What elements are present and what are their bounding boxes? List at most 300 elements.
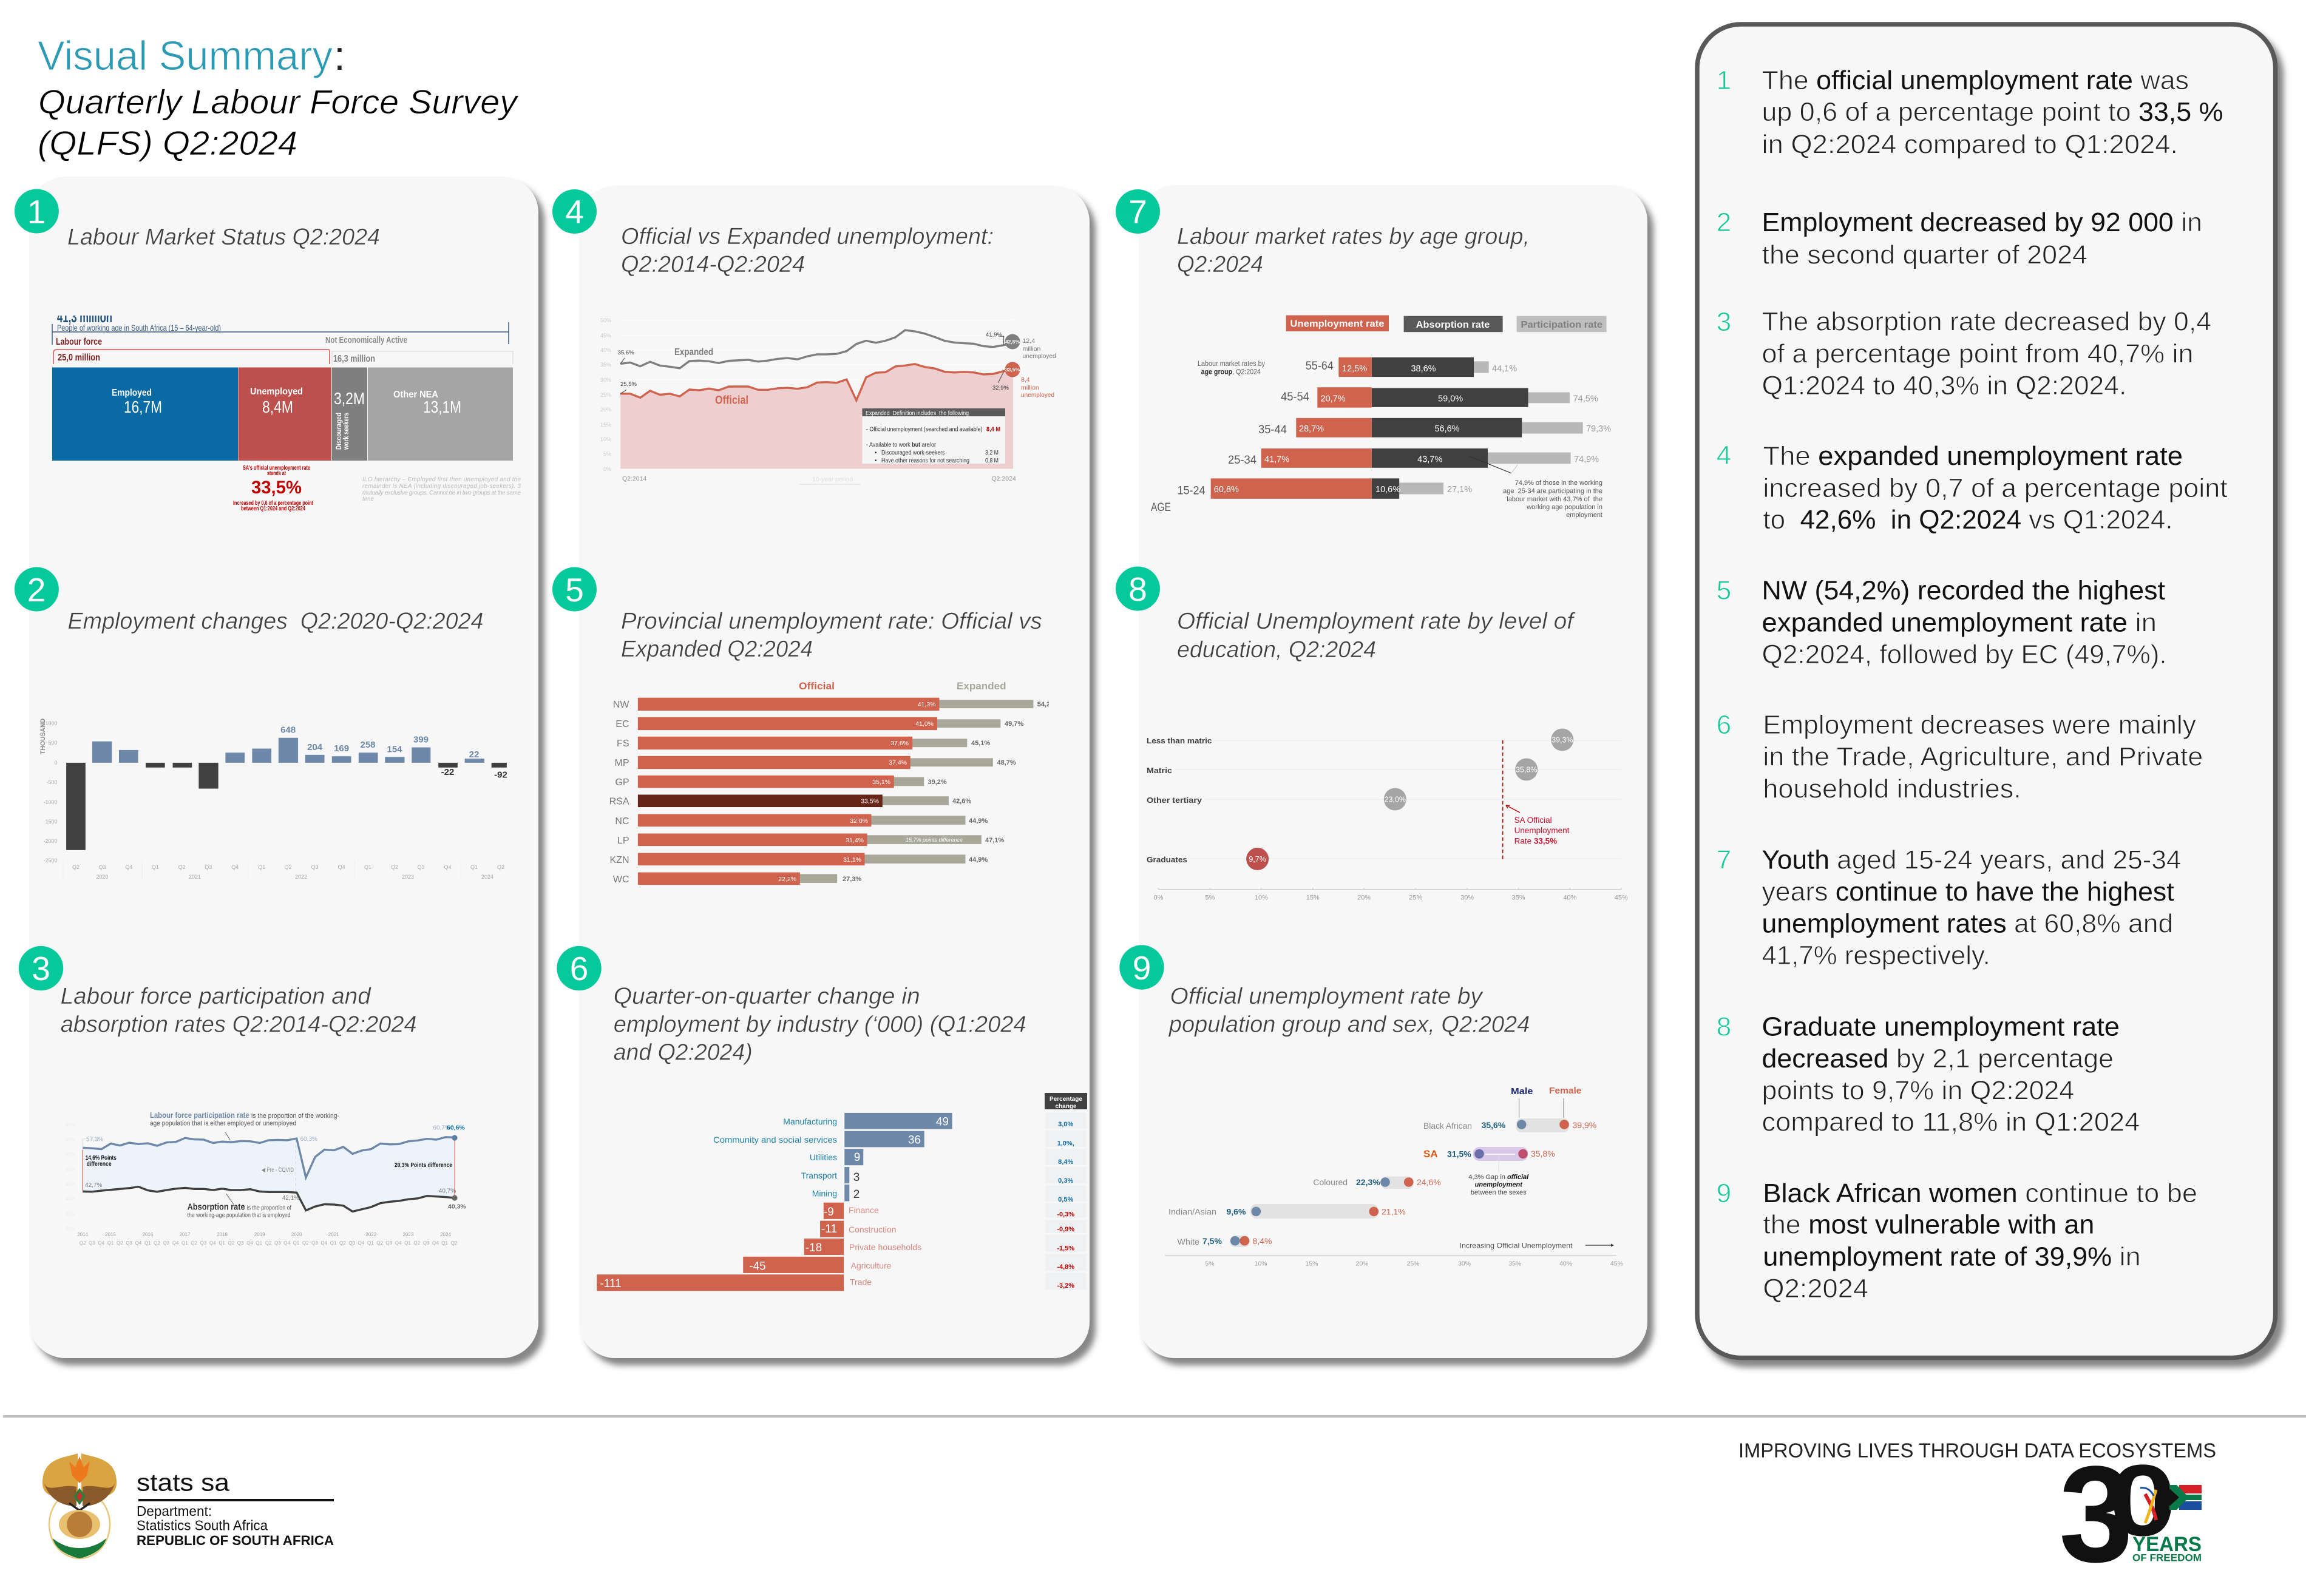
finding 7 [1717, 845, 2182, 970]
chart: labour market stacked bar: Not Economically Active [325, 335, 407, 345]
bar chart: provincial rates: 35,1% [872, 779, 890, 786]
bar chart: industry change: -9 [824, 1206, 834, 1219]
line chart: participation and absorption rates: 40% [66, 1196, 75, 1202]
finding 4: to 42,6% in Q2:2024 vs Q1:2024. [1763, 505, 2173, 535]
dumbbell chart: population group and sex: 9,6% [1226, 1206, 1246, 1216]
heading 6: Quarter-on-quarter change in [614, 984, 920, 1009]
line chart: official vs expanded unemployment: 20% [600, 407, 611, 413]
chart: labour market stacked bar: mutually exclusive groups. Cannot be in two groups at the same [362, 490, 521, 496]
badge 1 [15, 189, 59, 233]
line chart: participation and absorption rates: 2024 [440, 1232, 451, 1237]
section 9: population group and sex [1119, 945, 1623, 1267]
chart: labour market stacked bar: stands at [267, 470, 286, 477]
finding 5: expanded unemployment rate in [1762, 607, 2157, 637]
finding 7: years continue to have the highest [1762, 877, 2174, 907]
diverging bar chart: age groups: 12,5% [1342, 364, 1367, 374]
box: expanded definition: 8,4 M [986, 426, 1000, 433]
table: percentage change: -1,5% [1057, 1245, 1074, 1253]
heading 2: Employment changes Q2:2020-Q2:2024 [68, 609, 483, 634]
table: percentage change: 0,5% [1058, 1196, 1073, 1203]
line chart: participation and absorption rates: 42,1% [282, 1195, 299, 1202]
annotation: gap between sexes [1468, 1174, 1529, 1196]
diverging bar chart: age groups: 43,7% [1417, 455, 1442, 465]
bar chart: employment changes: -2000 [43, 838, 57, 844]
bar chart: industry change: Finance [849, 1205, 879, 1215]
dot plot: education: 30% [1460, 894, 1474, 902]
key findings card [1697, 24, 2276, 1358]
line chart: participation and absorption rates: 55% [66, 1152, 75, 1157]
bar chart: industry change: 2 [853, 1188, 860, 1201]
bar chart: provincial rates: 54,2% [1037, 701, 1056, 708]
finding 8: Graduate unemployment rate [1762, 1012, 2120, 1041]
line chart: participation and absorption rates: 60,7% [433, 1124, 450, 1131]
bar chart: industry change: -18 [805, 1242, 822, 1254]
dumbbell chart: population group and sex: 39,9% [1572, 1120, 1596, 1130]
heading 9 [1168, 984, 1530, 1038]
finding 6: Employment decreases were mainly [1763, 710, 2196, 740]
bar chart: employment changes: Q3 [205, 864, 212, 870]
dumbbell chart: population group and sex: 7,5% [1202, 1236, 1222, 1246]
bar chart: provincial rates: Official [799, 680, 835, 692]
finding 9: unemployment rate of 39,9% in [1763, 1242, 2141, 1271]
diverging bar chart: age groups: 38,6% [1411, 364, 1436, 374]
dumbbell chart: population group and sex: 45% [1610, 1260, 1623, 1267]
line chart: official vs expanded unemployment: 25,5% [620, 381, 637, 388]
diverging bar chart: age groups: 25-34 [1228, 454, 1256, 467]
annotation: 25-34 [1503, 479, 1602, 519]
bar chart: provincial rates: 37,6% [890, 740, 909, 747]
box: expanded definition: Expanded Definition includes the following [866, 410, 969, 417]
dumbbell chart: population group and sex: 8,4% [1253, 1236, 1272, 1246]
section 7: rates by age group [1116, 189, 1611, 519]
finding 3 [1717, 307, 2211, 401]
bar chart: employment changes: Q2 [497, 864, 504, 870]
finding 1: up 0,6 of a percentage point to 33,5 % [1762, 97, 2223, 127]
line chart: official vs expanded unemployment [600, 317, 1056, 484]
department text [137, 1503, 334, 1548]
dumbbell chart: population group and sex: 31,5% [1447, 1149, 1471, 1158]
chart: labour market stacked bar: Increased by 0,6 of a percentage point [233, 500, 313, 507]
panel: column 3 [1116, 185, 1647, 1358]
dumbbell chart: population group and sex: 24,6% [1417, 1177, 1441, 1187]
finding 5: Q2:2024, followed by EC (49,7%). [1762, 640, 2167, 669]
badge 8: 8 [1128, 570, 1147, 608]
bar chart: industry change: 9 [854, 1151, 860, 1164]
department text: Department: [137, 1503, 212, 1519]
bar chart: provincial rates: 39,2% [927, 779, 947, 786]
chart: labour market stacked bar: Employed [112, 388, 152, 398]
line chart: official vs expanded unemployment: 35,6% [618, 350, 634, 356]
table: percentage change: 8,4% [1058, 1158, 1073, 1166]
footer: slogan: IMPROVING LIVES THROUGH DATA ECOSYSTEMS [1738, 1439, 2216, 1462]
line chart: official vs expanded unemployment: Q2:2014 [622, 475, 646, 482]
bar chart: provincial rates: FS [617, 739, 629, 749]
bar chart: industry change: Private households [849, 1242, 921, 1252]
bar chart: provincial rates: 47,1% [985, 837, 1004, 844]
line chart: official vs expanded unemployment: 32,9% [992, 385, 1009, 391]
finding 5: NW (54,2%) recorded the highest [1762, 576, 2165, 606]
legend: age group rates: Unemployment rate [1290, 319, 1385, 330]
legend: age group rates [1286, 316, 1607, 332]
dot plot: education: 40% [1563, 894, 1577, 902]
chart: labour market stacked bar: 16,3 million [333, 354, 375, 364]
badge 3: 3 [32, 950, 50, 987]
diverging bar chart: age groups: 45-54 [1281, 391, 1309, 404]
card background column 2 [579, 186, 1090, 1358]
dumbbell chart: population group and sex: 20% [1355, 1260, 1369, 1267]
dumbbell chart: population group and sex: Coloured [1313, 1177, 1348, 1187]
chart: labour market stacked bar: 8,4M [262, 397, 293, 416]
finding 7: Youth aged 15-24 years, and 25-34 [1762, 845, 2182, 875]
heading 8 [1177, 609, 1576, 663]
finding 8 [1717, 1012, 2140, 1137]
heading 3 [61, 984, 417, 1038]
bar chart: employment changes: 204 [307, 742, 323, 752]
line chart: participation and absorption rates: is the proportion of the working- [251, 1112, 339, 1120]
table: percentage change [1045, 1093, 1087, 1290]
bar chart: provincial rates [609, 680, 1056, 885]
footer: stats sa logo [42, 1453, 334, 1558]
finding 6 [1717, 710, 2203, 803]
bar chart: provincial rates: LP [617, 836, 629, 846]
finding 7: 41,7% respectively. [1762, 941, 1990, 970]
bar chart: provincial rates: 32,0% [850, 817, 868, 825]
dumbbell chart: population group and sex: Indian/Asian [1168, 1206, 1216, 1216]
bar chart: industry change: 49 [936, 1115, 949, 1129]
annotation: 25-34: 74,9% of those in the working [1515, 479, 1602, 487]
bar chart: provincial rates: GP [615, 777, 629, 788]
heading 4: Official vs Expanded unemployment: [621, 224, 994, 249]
chart: labour market stacked bar: work seekers [342, 413, 350, 450]
finding 4: The expanded unemployment rate [1763, 441, 2183, 471]
chart: labour market stacked bar: remainder is NEA (including discouraged job-seekers). 3 [362, 483, 521, 490]
bar chart: provincial rates: KZN [609, 855, 629, 865]
dumbbell chart: population group and sex: Black African [1423, 1121, 1472, 1131]
chart: labour market stacked bar: 25,0 million [58, 353, 100, 363]
dot plot: education: 5% [1206, 894, 1215, 902]
finding 3: Q1:2024 to 40,3% in Q2:2024. [1762, 371, 2126, 401]
bar chart: industry change: Transport [801, 1171, 837, 1180]
diverging bar chart: age groups: AGE [1151, 501, 1171, 514]
bar chart: provincial rates: 33,5% [861, 797, 879, 805]
line chart: participation and absorption rates: 42,7% [85, 1182, 102, 1189]
line chart: participation and absorption rates: 2017 [180, 1232, 191, 1237]
dumbbell chart: population group and sex: 22,3% [1356, 1177, 1380, 1187]
diverging bar chart: age groups: 59,0% [1438, 394, 1463, 404]
dumbbell chart: population group and sex: 15% [1305, 1260, 1318, 1267]
title block [38, 33, 519, 162]
dumbbell chart: population group and sex: Increasing Official Unemployment [1459, 1242, 1573, 1250]
line chart: participation and absorption rates: ◀ Pre - COVID [262, 1167, 294, 1174]
table: percentage change: change [1055, 1103, 1077, 1110]
bar chart: employment changes: Q1 [470, 864, 478, 870]
heading 4: Q2:2014-Q2:2024 [621, 252, 805, 277]
line chart: participation and absorption rates: 40,7% [439, 1188, 456, 1195]
bar chart: provincial rates: NW [613, 700, 629, 710]
footer: 30 years of freedom logo [2059, 1437, 2202, 1591]
dumbbell chart: population group and sex: White [1178, 1237, 1199, 1246]
dot plot: education [1147, 728, 1628, 902]
bar chart: employment changes: -500 [46, 779, 57, 785]
finding 4: increased by 0,7 of a percentage point [1763, 473, 2228, 503]
heading 7 [1177, 224, 1530, 277]
line chart: participation and absorption rates: 50% [66, 1167, 75, 1172]
dot plot: education: Unemployment [1514, 826, 1570, 835]
heading 9: population group and sex, Q2:2024 [1168, 1012, 1530, 1038]
bar chart: employment changes: Q2 [285, 864, 292, 870]
line chart: participation and absorption rates: 40,3% [448, 1203, 466, 1210]
diverging bar chart: age groups: 28,7% [1299, 424, 1324, 434]
bar chart: employment changes: 2020 [96, 874, 108, 880]
finding 8: 8 [1717, 1012, 1731, 1041]
box: expanded definition [862, 408, 1005, 464]
icon: coat of arms [42, 1453, 117, 1558]
icon: south african flag [2140, 1485, 2202, 1523]
line chart: participation and absorption rates: difference [87, 1161, 112, 1168]
heading 9: Official unemployment rate by [1170, 984, 1484, 1009]
bar chart: employment changes: Q1 [258, 864, 265, 870]
line chart: participation and absorption rates: 30% [66, 1226, 75, 1232]
finding 2: the second quarter of 2024 [1762, 240, 2087, 269]
heading 4 [621, 224, 994, 277]
section 1: labour market status [15, 189, 521, 512]
bar chart: employment changes: Q4 [338, 864, 345, 870]
footer divider [3, 1415, 2306, 1418]
badge 9: 9 [1133, 949, 1151, 987]
bar chart: industry change [597, 1093, 1087, 1291]
line chart: official vs expanded unemployment: 5% [603, 451, 611, 457]
dumbbell chart: population group and sex: 5% [1205, 1260, 1215, 1267]
bar chart: industry change: Mining [812, 1189, 837, 1199]
finding 9 [1717, 1178, 2197, 1304]
bar chart: employment changes: Q4 [125, 864, 132, 870]
heading 7: Q2:2024 [1177, 252, 1263, 277]
title block: : [334, 33, 345, 79]
finding 9: 9 [1717, 1178, 1731, 1208]
line chart: official vs expanded unemployment: 15% [600, 422, 611, 428]
title block: Quarterly Labour Force Survey [38, 83, 519, 121]
line chart: participation and absorption rates: 2021 [328, 1232, 339, 1237]
line chart: participation and absorption rates: 20,3% Points difference [395, 1162, 452, 1169]
bar chart: provincial rates: 45,1% [971, 740, 990, 747]
chart: labour market stacked bar: SA's official unemployment rate [243, 465, 310, 472]
heading 6: employment by industry (‘000) (Q1:2024 [614, 1012, 1026, 1038]
chart: labour market stacked bar [52, 308, 521, 512]
finding 4: 4 [1717, 441, 1731, 470]
finding 5: 5 [1717, 576, 1731, 606]
bar chart: employment changes: Q3 [98, 864, 106, 870]
dumbbell chart: population group and sex: 40% [1559, 1260, 1572, 1267]
finding 1: The official unemployment rate was [1762, 66, 2189, 95]
bar chart: provincial rates: RSA [609, 796, 629, 807]
bar chart: industry change: 36 [908, 1134, 921, 1146]
line chart: participation and absorption rates: age population that is either employed or unemployed [150, 1120, 296, 1128]
table: percentage change: -3,2% [1057, 1282, 1074, 1290]
dot plot: education: 15% [1306, 894, 1320, 902]
badge 7 [1116, 189, 1160, 234]
bar chart: employment changes: 22 [469, 749, 479, 760]
heading 5 [621, 609, 1042, 662]
annotation: 25-34: age 25-34 are participating in the [1503, 487, 1602, 495]
card background column 1 [29, 177, 538, 1358]
bar chart: provincial rates: WC [613, 874, 629, 885]
stats sa wordmark: stats sa [137, 1470, 230, 1496]
section 2: employment changes [15, 567, 507, 880]
heading 3: Labour force participation and [61, 984, 372, 1009]
line chart: official vs expanded unemployment: 41,9% [986, 332, 1002, 339]
bar chart: provincial rates: 27,3% [843, 876, 861, 883]
finding 3: of a percentage point from 40,7% in [1762, 339, 2193, 369]
line chart: participation and absorption rates: 60,3% [300, 1136, 317, 1143]
box: expanded definition: • [875, 458, 877, 464]
finding 2: Employment decreased by 92 000 in [1762, 208, 2202, 237]
diverging bar chart: age groups: 27,1% [1447, 485, 1472, 495]
diverging bar chart: age groups: 74,5% [1573, 394, 1598, 404]
bar chart: employment changes: 2021 [189, 874, 201, 880]
finding 6: 6 [1717, 710, 1731, 740]
dumbbell chart: population group and sex: 35,8% [1531, 1149, 1555, 1158]
badge 5 [552, 567, 597, 612]
line chart: official vs expanded unemployment: 50% [600, 317, 611, 323]
bar chart: employment changes: 648 [280, 725, 296, 735]
diverging bar chart: age groups: 56,6% [1434, 424, 1460, 434]
bar chart: employment changes: 2024 [481, 874, 493, 880]
bar chart: employment changes: Q2 [391, 864, 398, 870]
badge 6: 6 [570, 950, 588, 987]
table: percentage change: 3,0% [1058, 1121, 1073, 1128]
legend: age group rates: Participation rate [1521, 320, 1602, 330]
annotation: 25-34: labour market with 43,7% of the [1507, 496, 1602, 503]
bar chart: industry change: -111 [600, 1277, 622, 1290]
badge 4 [552, 189, 597, 234]
bar chart: industry change: Construction [849, 1225, 897, 1234]
line chart: participation and absorption rates: 60,6% [447, 1124, 465, 1131]
heading 8: education, Q2:2024 [1177, 637, 1376, 663]
finding 9: Black African women continue to be [1763, 1178, 2197, 1208]
finding 6: in the Trade, Agriculture, and Private [1763, 742, 2203, 772]
dumbbell chart: population group and sex: 30% [1458, 1260, 1471, 1267]
table: percentage change: 0,3% [1058, 1177, 1073, 1185]
badge 4: 4 [565, 193, 584, 231]
dumbbell chart: population group and sex: 35% [1508, 1260, 1521, 1267]
dot plot: education: SA Official [1514, 816, 1552, 825]
heading 8: Official Unemployment rate by level of [1177, 609, 1576, 634]
chart: labour market stacked bar: 13,1M [423, 397, 461, 416]
line chart: official vs expanded unemployment: 42,6% [1005, 339, 1020, 345]
panel: key findings [1697, 24, 2276, 1358]
bar chart: employment changes: -92 [494, 769, 507, 780]
bar chart: industry change: Manufacturing [783, 1117, 837, 1126]
finding 3: 3 [1717, 307, 1731, 337]
bar chart: employment changes [39, 719, 507, 880]
chart: labour market stacked bar: Discouraged [334, 413, 343, 450]
line chart: official vs expanded unemployment: 45% [600, 333, 611, 339]
bar chart: employment changes: 169 [334, 743, 349, 754]
section 6: employment by industry [557, 946, 1087, 1291]
diverging bar chart: age groups: 35-44 [1258, 424, 1287, 436]
line chart: official vs expanded unemployment: 40% [600, 347, 611, 353]
table: percentage change: 1,0%, [1057, 1140, 1074, 1148]
dot plot: education: 35,8% [1516, 766, 1537, 774]
bar chart: employment changes: Q3 [311, 864, 319, 870]
bar chart: provincial rates: 31,4% [846, 837, 864, 844]
bar chart: provincial rates: 42,6% [952, 797, 971, 805]
chart: labour market stacked bar: between Q1:2024 and Q2:2024 [241, 506, 305, 512]
badge 2 [15, 567, 59, 612]
line chart: participation and absorption rates: the working-age population that is employed [188, 1212, 291, 1219]
bar chart: provincial rates: 31,1% [843, 856, 861, 864]
finding 8: decreased by 2,1 percentage [1762, 1044, 2114, 1074]
footer: 30 years of freedom logo: 0 [2109, 1444, 2177, 1557]
line chart: official vs expanded unemployment: 25% [600, 392, 611, 398]
diverging bar chart: age groups: 60,8% [1214, 485, 1239, 495]
line chart: official vs expanded unemployment: 33,5% [1005, 367, 1020, 373]
line chart: participation and absorption rates: 65% [66, 1122, 75, 1128]
line chart: official vs expanded unemployment: 0% [603, 466, 611, 472]
badge 9 [1119, 945, 1164, 990]
finding 5 [1717, 576, 2167, 669]
bar chart: employment changes: Q2 [178, 864, 186, 870]
line chart: official vs expanded unemployment: Q2:2024 [992, 475, 1016, 482]
annotation: 25-34: working age population in [1526, 504, 1602, 511]
line chart: participation and absorption rates: 60% [66, 1137, 75, 1143]
bar chart: employment changes: 1000 [45, 720, 57, 726]
dot plot: education: 10% [1255, 894, 1268, 902]
finding 1: 1 [1717, 66, 1731, 95]
box: expanded definition: - Available to work but are/or [866, 442, 937, 448]
annotation: gap between sexes: unemployment [1475, 1182, 1523, 1189]
dot plot: education: 25% [1409, 894, 1422, 902]
heading 6 [614, 984, 1026, 1066]
line chart: participation and absorption rates: 14,6% Points [86, 1155, 117, 1161]
finding 6: household industries. [1763, 774, 2021, 803]
dumbbell chart: population group and sex: Female [1549, 1086, 1581, 1096]
legend: age group rates: Absorption rate [1416, 320, 1490, 330]
finding 2: 2 [1717, 208, 1731, 237]
bar chart: employment changes: 399 [413, 735, 429, 745]
line chart: participation and absorption rates: 2016 [143, 1232, 154, 1237]
title block: (QLFS) Q2:2024 [38, 124, 297, 162]
bar chart: provincial rates: 41,3% [918, 701, 936, 708]
section 8: unemployment by education [1116, 567, 1628, 902]
bar chart: provincial rates: 48,7% [997, 759, 1016, 766]
department text: Statistics South Africa [137, 1518, 268, 1533]
annotation: gap between sexes: 4,3% Gap in official [1468, 1174, 1529, 1181]
badge 6 [557, 946, 602, 990]
bar chart: employment changes: -1000 [43, 799, 57, 805]
diverging bar chart: age groups: 55-64 [1306, 360, 1334, 373]
finding 9: Q2:2024 [1763, 1274, 1868, 1304]
bar chart: industry change: Trade [850, 1277, 872, 1287]
dot plot: education: Matric [1147, 766, 1172, 775]
line chart: participation and absorption rates: 57,3% [86, 1137, 103, 1143]
bar chart: employment changes: THOUSAND [39, 719, 47, 754]
bar chart: employment changes: 2023 [402, 874, 414, 880]
line chart: participation and absorption rates: 45% [66, 1182, 75, 1187]
bar chart: provincial rates: 22,2% [778, 876, 796, 883]
box: expanded definition: - Official unemployment (searched and available) [866, 426, 982, 433]
diverging bar chart: age groups: 41,7% [1264, 455, 1289, 465]
bar chart: employment changes: 500 [48, 740, 57, 746]
line chart: participation and absorption rates: 2022 [365, 1232, 377, 1237]
dot plot: education: Graduates [1147, 855, 1187, 864]
dot plot: education: Other tertiary [1147, 796, 1202, 805]
box: expanded definition: 3,2 M [985, 450, 999, 456]
bar chart: employment changes: 2022 [295, 874, 307, 880]
table: percentage change: Percentage [1050, 1096, 1082, 1103]
wordmark rule [138, 1499, 334, 1501]
bar chart: provincial rates: NC [615, 816, 629, 827]
